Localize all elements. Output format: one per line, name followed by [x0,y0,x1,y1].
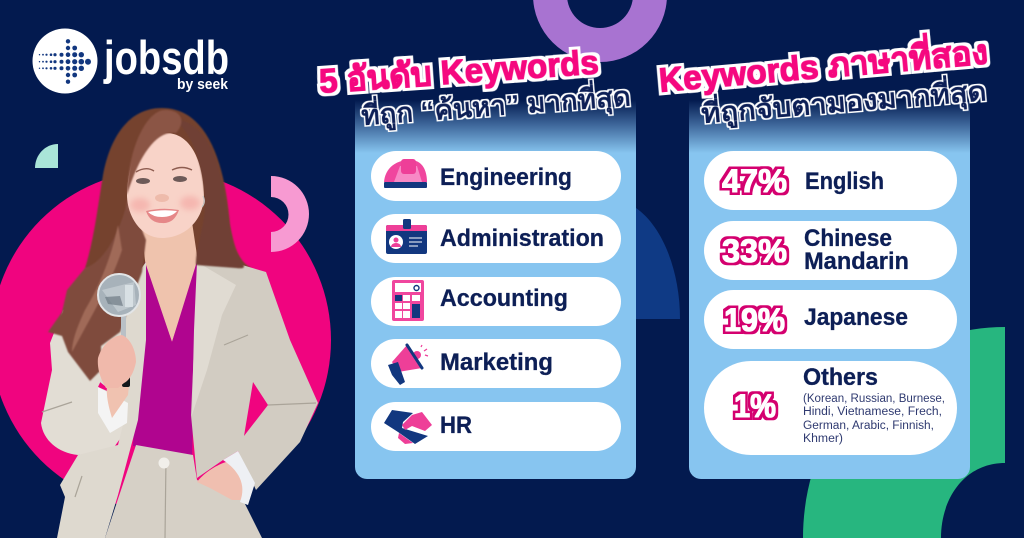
cuff and raised forearm [98,385,129,433]
jacket left panel [57,262,146,538]
person holding magnifying glass [41,108,318,538]
label: Chinese: Chinese [804,225,892,252]
percent: 19% [724,302,785,338]
panel: top 5 keywords [355,100,636,479]
label: English [805,168,884,195]
logo [32,28,229,94]
nose [155,194,169,202]
jacket seams [42,335,316,538]
trouser button [158,458,170,468]
list of other languages: German, Arabic, Finnish, [803,420,934,432]
icon: handshake [384,410,432,444]
row: Japanese [704,290,957,349]
list of other languages [803,393,945,445]
hand in pocket [197,451,255,505]
label: Administration [440,225,604,252]
earring [202,196,204,207]
row: Chinese Mandarin [704,221,957,280]
jacket right panel and sleeve [191,258,318,490]
blush [130,196,200,212]
logo: circle mark [32,28,98,94]
label: HR [440,412,472,439]
decoration: pink circle [0,170,331,510]
jacket left sleeve [41,298,130,455]
heading: top 5 keywords: 5 อันดับ Keywords [318,44,600,101]
magnifying glass [98,274,140,387]
row: Accounting [371,277,621,326]
percent: 1% [734,388,776,424]
heading: top 5 keywords [318,44,632,133]
icon: calculator [392,280,424,321]
icon: id badge [386,219,427,254]
subheading: ที่ถูกจับตามองมากที่สุด [700,71,988,131]
label: Others [803,364,878,391]
percent: 47% [722,163,787,199]
icon: megaphone [388,345,428,385]
row: Marketing [371,339,621,388]
logo: wordmark: jobsdb [103,31,229,84]
top hair [127,110,181,195]
icon: hard hat [384,159,427,188]
row: Administration [371,214,621,263]
label: Marketing [440,349,553,376]
raised hand [98,335,136,388]
panel background [689,100,970,479]
label: Accounting [440,285,568,312]
panel: second languages [689,100,970,479]
right hair [174,120,244,268]
lapel fold [192,262,236,415]
row: Others [704,361,957,455]
decoration: blue quarter [636,208,680,319]
subheading: ที่ถูก “ค้นหา” มากที่สุด [360,76,632,133]
label: Engineering [440,164,572,191]
mouth [146,209,179,223]
hair strands [72,225,122,352]
list of other languages: (Korean, Russian, Burnese, [803,393,945,405]
list of other languages: Khmer) [803,433,843,445]
face [127,133,204,238]
row: HR [371,402,621,451]
row: Engineering [371,151,621,201]
heading: second language keywords: Keywords ภาษาที่สอง [657,27,989,100]
decoration: mint quarter [35,144,58,168]
decoration: green ring sector [803,327,1005,538]
panel background [355,100,636,479]
list of other languages: Hindi, Vietnamese, Frech, [803,406,942,418]
logo: by seek: by seek [177,76,229,93]
hair back [85,108,252,275]
label: Japanese [804,304,908,331]
row: English [704,151,957,210]
trousers [105,445,262,538]
blouse [133,258,198,456]
percent: 33% [722,233,787,269]
eyes [136,168,192,184]
heading: second language keywords [657,27,989,131]
label: Mandarin: Mandarin [804,248,909,275]
front hair over shoulder [48,190,146,381]
gap between arm and body [244,382,268,436]
neck and chest [140,222,198,342]
decoration: lavender ring [533,0,667,62]
decoration: light pink half ring [271,176,309,252]
